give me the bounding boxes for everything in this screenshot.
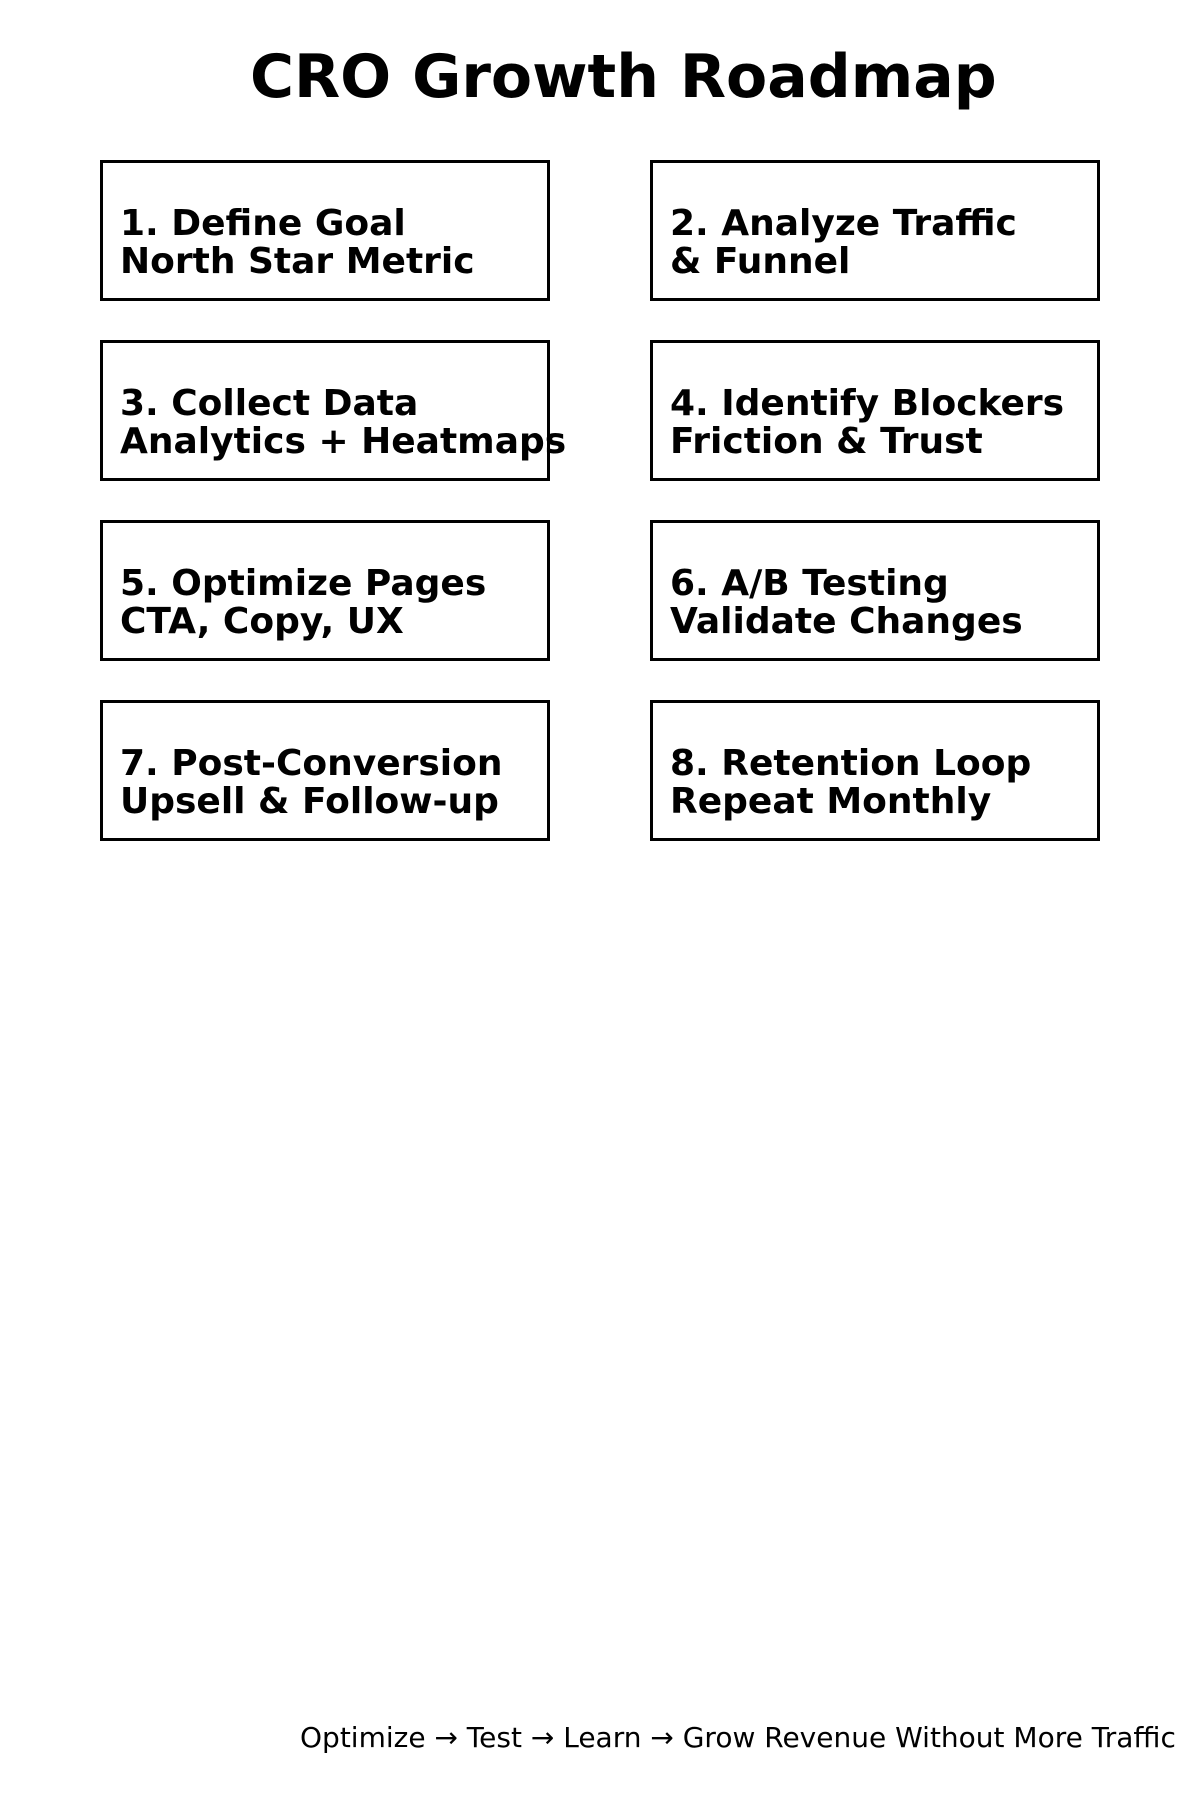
panel: step 1 (102, 162, 548, 300)
panel: step 4: 4. Identify Blockers (670, 383, 1064, 424)
panel: step 2 (652, 162, 1098, 300)
panel: step 1: 1. Define Goal (120, 203, 406, 244)
panel: step 7: Upsell & Follow-up (120, 781, 499, 822)
panel: step 3: 3. Collect Data (120, 383, 418, 424)
title: CRO Growth Roadmap (250, 42, 997, 112)
panel: step 6 (652, 522, 1098, 660)
panel: step 5 (102, 522, 548, 660)
panel: step 7 (102, 702, 548, 840)
panel: step 3 (102, 342, 566, 480)
footer tagline: Optimize → Test → Learn → Grow Revenue Without More Traffic (300, 1721, 1176, 1754)
panel: step 4 (652, 342, 1098, 480)
panel: step 5: 5. Optimize Pages (120, 563, 486, 604)
panel: step 6: 6. A/B Testing (670, 563, 949, 604)
panel: step 7: 7. Post-Conversion (120, 743, 502, 784)
panel: step 6: Validate Changes (670, 601, 1023, 642)
panel: step 8 (652, 702, 1098, 840)
panel: step 4: Friction & Trust (670, 421, 983, 462)
panel: step 2: 2. Analyze Traffic (670, 203, 1017, 244)
panel: step 3: Analytics + Heatmaps (120, 421, 566, 462)
panel: step 5: CTA, Copy, UX (120, 601, 404, 642)
panel: step 8: Repeat Monthly (670, 781, 991, 822)
panel: step 1: North Star Metric (120, 241, 475, 282)
panel: step 2: & Funnel (670, 241, 850, 282)
panel: step 8: 8. Retention Loop (670, 743, 1031, 784)
